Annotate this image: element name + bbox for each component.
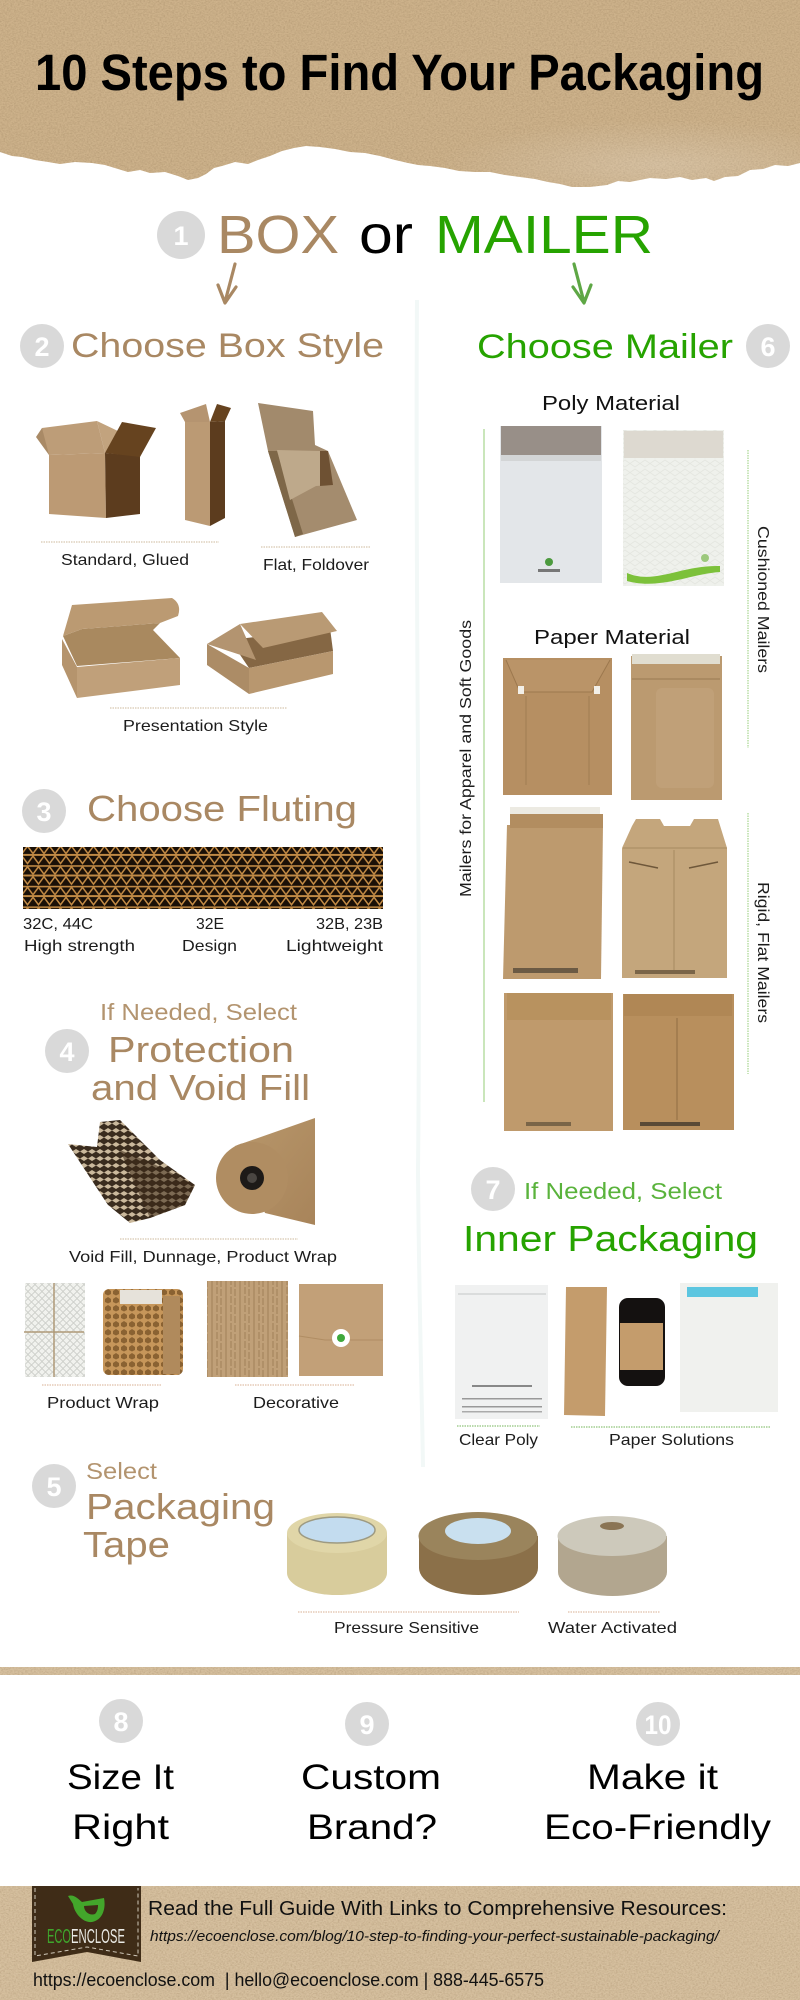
flute labels: 32C, 44C: [23, 916, 93, 933]
label: decorative: [235, 1385, 355, 1412]
icon: clear pressure sensitive tape: [287, 1513, 387, 1595]
step 9: custom brand: Custom: [301, 1758, 441, 1797]
flute labels: High strength: [24, 938, 135, 955]
icon: tan honeycomb wrap: [103, 1289, 183, 1375]
step 2 heading: choose box style: [20, 324, 384, 368]
icon: padded paper mailer: [631, 654, 722, 800]
icon: net-wrapped parcel: [24, 1283, 85, 1377]
step 5 heading: packaging tape: Tape: [83, 1524, 170, 1565]
panel: torn kraft paper header: [0, 0, 800, 187]
step 4 heading: protection and void fill: 4: [59, 1037, 75, 1067]
icon: kraft envelope with sticker: [299, 1284, 383, 1376]
icon: kraft rigid mailer: [623, 994, 734, 1130]
step 10: make it eco-friendly: 10: [644, 1710, 672, 1740]
icon: clear poly bag: [455, 1285, 548, 1419]
icon: green bird: [68, 1896, 105, 1922]
step 9: custom brand: 9: [359, 1710, 375, 1740]
step 8: size it right: Right: [72, 1808, 169, 1847]
step 5 heading: packaging tape: [32, 1458, 275, 1565]
label: rigid flat mailers: Rigid, Flat Mailers: [754, 882, 771, 1023]
icon: black roll with paper band: [619, 1298, 665, 1386]
icon: white glassine bag: [680, 1283, 778, 1412]
icon: flat foldover box: [258, 403, 357, 537]
icon: presentation box half closed: [207, 612, 337, 694]
step 8: size it right: [67, 1699, 174, 1847]
icon: brown pressure sensitive tape: [418, 1512, 538, 1595]
label: product wrap: [42, 1385, 162, 1412]
label: paper solutions: Paper Solutions: [609, 1432, 734, 1449]
logo: ecoenclose badge: ENCLOSE: [71, 1926, 125, 1948]
panel: kraft footer: [0, 1886, 800, 2000]
label: void fill, dunnage, product wrap: Void Fill, Dunnage, Product Wrap: [69, 1249, 337, 1266]
label: product wrap: Product Wrap: [47, 1395, 159, 1412]
flute labels: Design: [182, 938, 237, 955]
flute labels: 32E: [196, 916, 224, 933]
label: flat foldover: [261, 547, 370, 574]
icon: rigid flap mailer: [622, 819, 727, 978]
step 6 heading: choose mailer: [477, 324, 790, 368]
label: pressure sensitive: Pressure Sensitive: [334, 1620, 479, 1637]
heading: paper material: Paper Material: [534, 627, 690, 649]
label: mailers for apparel and soft goods: Mailers for Apparel and Soft Goods: [458, 620, 475, 897]
step 3 heading: choose fluting: Choose Fluting: [87, 788, 357, 829]
step 8: size it right: Size It: [67, 1758, 174, 1797]
step 1 heading: box or mailer: 1: [173, 221, 189, 251]
step 5 heading: packaging tape: 5: [46, 1472, 62, 1502]
label: cushioned mailers: Cushioned Mailers: [754, 526, 771, 673]
icon: water activated tape: [558, 1516, 667, 1596]
label: clear poly: [457, 1426, 540, 1449]
icon: white poly mailer: [500, 426, 602, 583]
step 10: make it eco-friendly: Eco-Friendly: [544, 1808, 772, 1847]
heading: poly material: Poly Material: [542, 393, 680, 415]
icon: honeycomb paper void fill: [68, 1120, 195, 1223]
step 6 heading: choose mailer: 6: [760, 332, 776, 362]
label: water activated: [548, 1612, 677, 1637]
step 10: make it eco-friendly: Make it: [587, 1758, 718, 1797]
label: standard glued: Standard, Glued: [61, 552, 189, 569]
step 7 heading: inner packaging: 7: [485, 1175, 501, 1205]
label: clear poly: Clear Poly: [459, 1432, 538, 1449]
footer link: guide url: https://ecoenclose.com/blog/10-step-to-finding-your-perfect-sustainable-packaging/: [150, 1928, 721, 1945]
step 1 heading: box or mailer: BOX: [217, 205, 339, 265]
step 6 heading: choose mailer: Choose Mailer: [477, 328, 733, 366]
step 9: custom brand: Brand?: [307, 1808, 437, 1847]
logo: ecoenclose badge: ECO: [47, 1926, 71, 1948]
label: water activated: Water Activated: [548, 1620, 677, 1637]
step 5 heading: packaging tape: Packaging: [86, 1486, 275, 1527]
icon: large paper mailer: [503, 807, 603, 979]
step 8: size it right: 8: [113, 1707, 129, 1737]
arrow: to mailer path: [573, 264, 591, 303]
flute labels: [23, 916, 384, 955]
step 1 heading: box or mailer: [157, 205, 653, 265]
step 7 heading: inner packaging: [463, 1167, 758, 1259]
step 4 heading: protection and void fill: [45, 999, 310, 1108]
icon: tall glued box: [180, 404, 231, 526]
icon: presentation box open: [62, 598, 180, 698]
label: presentation style: Presentation Style: [123, 718, 268, 735]
step 1 heading: box or mailer: or: [359, 205, 413, 265]
step 4 heading: protection and void fill: Protection: [108, 1029, 294, 1070]
flute labels: Lightweight: [286, 938, 384, 955]
icon: kraft flap envelope: [504, 993, 613, 1131]
step 1 heading: box or mailer: MAILER: [435, 205, 653, 265]
step 10: make it eco-friendly: [544, 1702, 772, 1847]
step 4 heading: protection and void fill: and Void Fill: [91, 1067, 310, 1108]
icon: kraft paper roll: [216, 1118, 315, 1225]
logo: ecoenclose badge: [32, 1886, 141, 1962]
step 5 heading: packaging tape: Select: [86, 1458, 158, 1484]
image: corrugated flute cross-section: [23, 847, 383, 909]
icon: crumpled kraft paper: [207, 1281, 288, 1377]
icon: rigid paper mailer square: [503, 658, 612, 795]
label: decorative: Decorative: [253, 1395, 339, 1412]
step 2 heading: choose box style: Choose Box Style: [71, 327, 384, 365]
step 7 heading: inner packaging: If Needed, Select: [524, 1178, 723, 1204]
flute labels: 32B, 23B: [316, 916, 383, 933]
step 4 heading: protection and void fill: If Needed, Select: [100, 999, 298, 1025]
label: flat foldover: Flat, Foldover: [263, 557, 370, 574]
icon: standard glued box: [36, 421, 156, 518]
icon: kraft paper card: [564, 1287, 607, 1416]
step 9: custom brand: [301, 1702, 441, 1847]
step 7 heading: inner packaging: Inner Packaging: [463, 1218, 758, 1259]
icon: cushioned poly mailer: [623, 430, 724, 586]
arrow: to box path: [218, 264, 236, 303]
step 3 heading: choose fluting: [22, 788, 357, 833]
footer text: read the full guide: Read the Full Guide With Links to Comprehensive Resources:: [148, 1898, 727, 1920]
footer contact details: https://ecoenclose.com | hello@ecoenclose.com | 888-445-6575: [33, 1970, 544, 1990]
panel: kraft divider band: [0, 1667, 800, 1675]
step 3 heading: choose fluting: 3: [36, 797, 52, 827]
step 2 heading: choose box style: 2: [34, 332, 50, 362]
